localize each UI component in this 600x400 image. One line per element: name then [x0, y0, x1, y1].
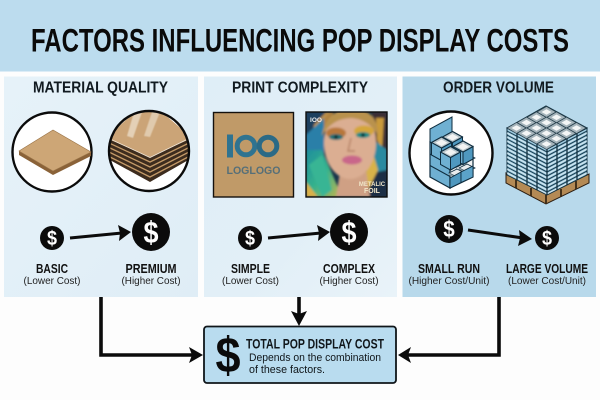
heading: order volume: ORDER VOLUME: [443, 80, 554, 96]
callout text: of these factors.: [249, 364, 325, 376]
label: complex: COMPLEX: [323, 261, 375, 276]
image: complex metallic foil print: FOIL: [364, 188, 381, 195]
cost arrow: small run to large volume: $: [443, 216, 455, 242]
image: complex metallic foil print: [306, 107, 387, 197]
image: complex metallic foil print: IOO: [310, 117, 322, 124]
image: simple logo print: [214, 112, 294, 197]
title banner: [0, 0, 600, 72]
label: simple: [222, 261, 279, 287]
cost arrow: basic to premium: $: [144, 215, 158, 250]
label: small run: [408, 261, 490, 287]
image: complex metallic foil print: METALIC: [359, 182, 386, 188]
cost arrow: simple to complex: [238, 213, 368, 251]
icon: small-run display stand: [410, 112, 492, 194]
label: simple: (Lower Cost): [222, 275, 279, 287]
label: basic: [24, 261, 80, 287]
heading: material quality: MATERIAL QUALITY: [33, 80, 168, 96]
panel: print complexity: [204, 76, 397, 297]
arrow: material quality to total: [101, 297, 203, 363]
cost arrow: small run to large volume: [435, 215, 559, 250]
callout text: TOTAL POP DISPLAY COST: [246, 336, 384, 352]
label: complex: (Higher Cost): [320, 275, 378, 287]
label: small run: SMALL RUN: [418, 261, 480, 276]
label: premium: [122, 261, 180, 287]
cost arrow: small run to large volume: $: [542, 228, 552, 250]
label: basic: BASIC: [36, 261, 68, 276]
icon: premium multi-layer board: [108, 110, 190, 192]
label: premium: (Higher Cost): [122, 275, 180, 287]
callout text: Depends on the combination: [249, 352, 381, 364]
image: simple logo print: LOGLOGO: [226, 165, 281, 177]
arrow: print complexity to total: [291, 297, 307, 326]
label: premium: PREMIUM: [126, 261, 176, 276]
label: large volume: [506, 261, 588, 287]
callout text: [246, 336, 384, 376]
icon: basic single-layer board: [12, 112, 92, 192]
label: basic: (Lower Cost): [24, 275, 80, 287]
icon: large-volume pallet: [506, 106, 589, 204]
heading: print complexity: PRINT COMPLEXITY: [232, 80, 368, 96]
label: simple: SIMPLE: [231, 261, 270, 276]
cost arrow: basic to premium: [40, 213, 170, 251]
cost arrow: basic to premium: $: [47, 228, 57, 250]
panel: order volume: [402, 76, 596, 297]
icon: dollar sign: $: [216, 328, 241, 384]
arrow: order volume to total: [398, 297, 499, 363]
label: large volume: (Lower Cost/Unit): [508, 275, 586, 287]
label: complex: [320, 261, 378, 287]
label: small run: (Higher Cost/Unit): [408, 275, 490, 287]
callout: total pop display cost: [204, 326, 396, 384]
cost arrow: simple to complex: $: [245, 228, 255, 250]
panel: material quality: [4, 76, 198, 297]
cost arrow: simple to complex: $: [342, 215, 356, 250]
